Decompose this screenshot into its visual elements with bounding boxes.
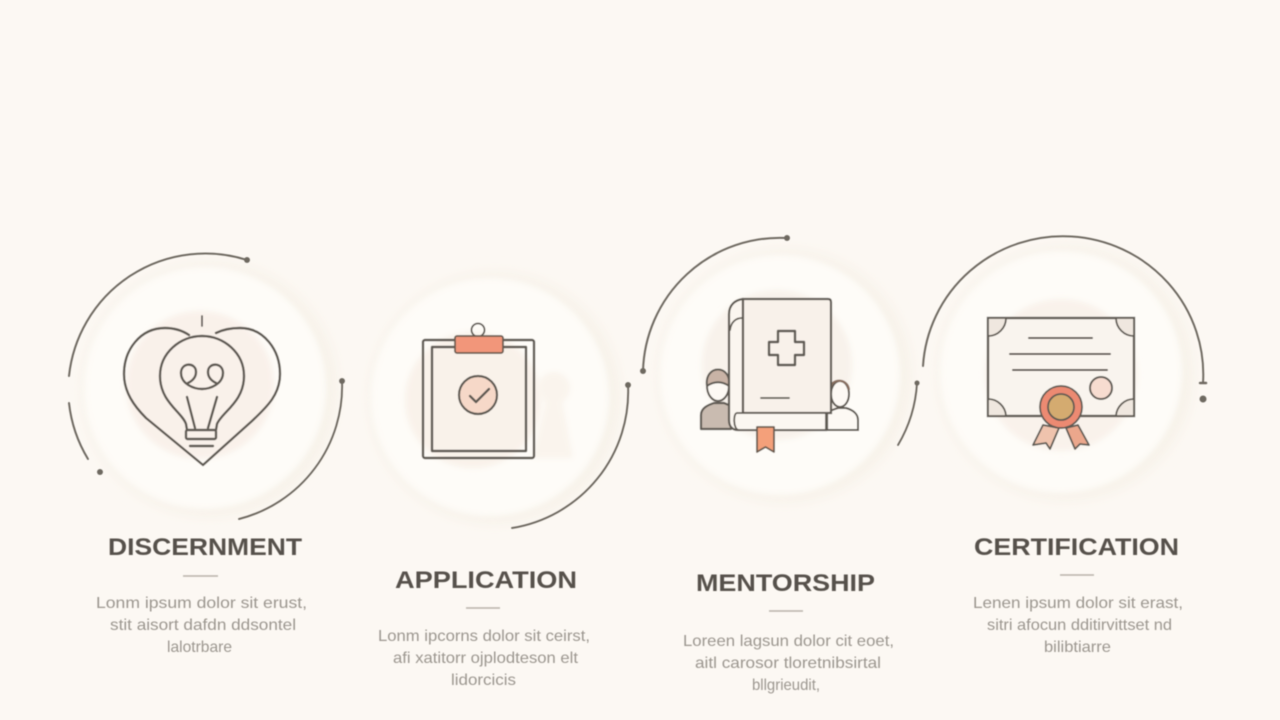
heading: certification: CERTIFICATION (974, 534, 1179, 561)
decorative keyhole shape (532, 372, 573, 458)
text: mentorship description: Loreen lagsun dolor cit eoet, (683, 633, 894, 650)
panel: application (370, 273, 631, 689)
progress arc: mentorship (640, 235, 920, 445)
text: certification description: Lenen ipsum dolor sit erast, (973, 595, 1183, 612)
heading: application: APPLICATION (395, 567, 577, 594)
text: mentorship description (683, 633, 894, 694)
text: certification description (973, 595, 1183, 656)
text: mentorship description: bllgrieudit, (752, 677, 820, 694)
text: discernment description: stit aisort dafdn ddsontel (110, 617, 296, 634)
panel: discernment (69, 253, 345, 656)
progress arc: discernment (69, 253, 345, 519)
text: mentorship description: aitl carosor tloretnibsirtal (695, 655, 881, 672)
text: application description (378, 628, 590, 689)
text: application description: lidorcicis (451, 672, 516, 689)
text: discernment description (96, 595, 307, 656)
icon: mentee right (825, 381, 858, 430)
icon: certificate with rosette (988, 318, 1134, 449)
panel: certification (923, 236, 1206, 656)
progress arc: certification (923, 236, 1206, 402)
progress arc: application (512, 382, 631, 528)
heading: mentorship: MENTORSHIP (696, 570, 875, 597)
heading: discernment: DISCERNMENT (108, 534, 302, 561)
text: application description: Lonm ipcorns dolor sit ceirst, (378, 628, 590, 645)
icon: clipboard with check (423, 324, 534, 458)
text: certification description: bilibtiarre (1044, 639, 1111, 656)
text: application description: afi xatitorr ojplodteson elt (393, 650, 579, 667)
text: discernment description: Lonm ipsum dolor sit erust, (96, 595, 307, 612)
icon: heart with light bulb (124, 316, 280, 465)
text: discernment description: lalotrbare (167, 639, 232, 656)
icon: mentor left (701, 370, 731, 429)
text: certification description: sitri afocun dditirvittset nd (987, 617, 1172, 634)
icon: book with cross (729, 299, 831, 452)
panel: mentorship (640, 235, 920, 694)
